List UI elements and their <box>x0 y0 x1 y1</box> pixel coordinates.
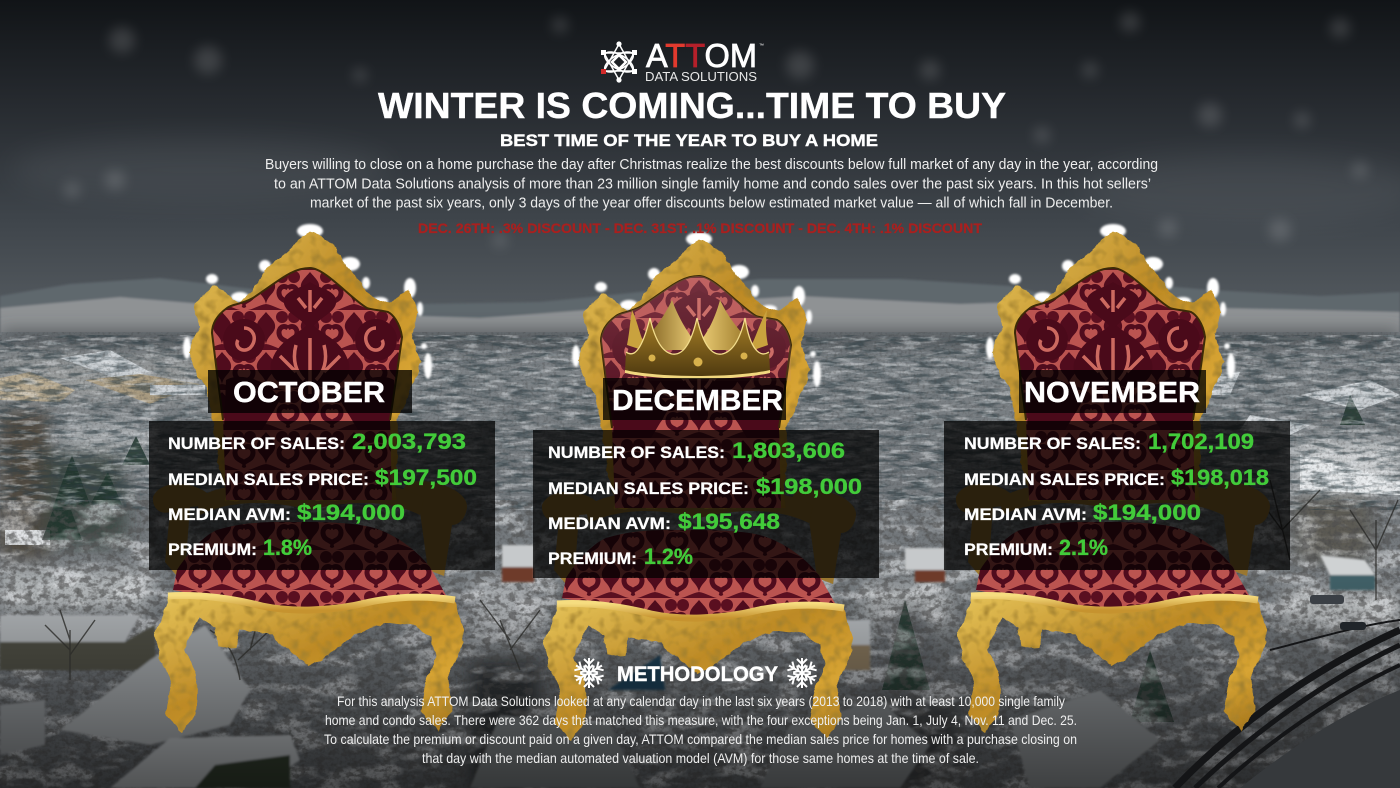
methodology heading with snowflake icons <box>574 658 817 688</box>
panel: December <box>533 378 879 578</box>
November data: $198,018 <box>1171 465 1269 490</box>
November data: MEDIAN AVM: <box>964 506 1087 524</box>
methodology text block <box>324 693 1077 766</box>
intro text block: Buyers willing to close on a home purchase the day after Christmas realize the best discounts below full market of any day in the year, according <box>265 157 1158 173</box>
October data: MEDIAN SALES PRICE: <box>168 471 369 489</box>
November data: $194,000 <box>1093 500 1201 525</box>
chair: October <box>153 224 467 731</box>
logo: ATTOM Data Solutions: DATA SOLUTIONS <box>645 69 757 84</box>
December heading: DECEMBER <box>612 385 783 417</box>
methodology text block: To calculate the premium or discount paid on a given day, ATTOM compared the median sales price for homes with a purchase closing on <box>324 731 1077 747</box>
October data: $197,500 <box>375 465 477 490</box>
logo: ATTOM Data Solutions: ™ <box>759 43 764 49</box>
December data: 1.2% <box>644 544 693 569</box>
intro text block: market of the past six years, only 3 days of the year offer discounts below estimated market value — all of which fall in December. <box>310 196 1113 212</box>
panel: November <box>944 370 1290 570</box>
title: WINTER IS COMING...TIME TO BUY <box>378 85 1006 126</box>
foreground houses <box>0 545 1375 788</box>
November data: MEDIAN SALES PRICE: <box>964 471 1165 489</box>
October data: MEDIAN AVM: <box>168 506 291 524</box>
November heading: NOVEMBER <box>1024 377 1200 409</box>
December data: MEDIAN AVM: <box>548 515 671 533</box>
methodology text block: home and condo sales. There were 362 days that matched this measure, with the four exceptions being Jan. 1, July 4, Nov. 11 and Dec. 25. <box>325 712 1077 728</box>
icon: snowflake left <box>574 658 604 688</box>
December data: $195,648 <box>678 509 780 534</box>
November data <box>944 421 1290 570</box>
December heading <box>603 378 786 420</box>
intro text block: to an ATTOM Data Solutions analysis of more than 23 million single family home and condo sales over the past six years. In this hot sellers’ <box>274 176 1151 192</box>
logo: ATTOM Data Solutions: ATTOM <box>646 37 757 74</box>
December data <box>533 430 879 578</box>
December data: NUMBER OF SALES: <box>548 444 725 462</box>
intro text block <box>265 157 1158 212</box>
October data: NUMBER OF SALES: <box>168 435 345 453</box>
November heading <box>1019 370 1206 413</box>
logo: ATTOM Data Solutions <box>601 37 764 84</box>
December data: $198,000 <box>756 474 862 499</box>
chair: December <box>542 232 856 739</box>
panel: October <box>149 370 495 570</box>
October data: 1.8% <box>263 535 312 560</box>
November data: PREMIUM: <box>964 541 1053 559</box>
icon: snowflake right <box>787 658 817 688</box>
December data: MEDIAN SALES PRICE: <box>548 480 749 498</box>
November data: NUMBER OF SALES: <box>964 435 1141 453</box>
methodology text block: that day with the median automated valuation model (AVM) for those same homes at the time of sale. <box>422 750 979 766</box>
icon: atom star <box>601 41 637 83</box>
subtitle: BEST TIME OF THE YEAR TO BUY A HOME <box>500 131 878 150</box>
October heading: OCTOBER <box>233 377 385 409</box>
discount dates callout: DEC. 26TH: .3% DISCOUNT - DEC. 31ST: .1% DISCOUNT - DEC. 4TH: .1% DISCOUNT <box>418 220 982 236</box>
October data: PREMIUM: <box>168 541 257 559</box>
November data: 2.1% <box>1059 535 1108 560</box>
chair: November <box>956 224 1270 731</box>
icon: gold crown on December chair <box>625 300 770 379</box>
low frequency scene masses <box>0 332 1400 788</box>
October data: 2,003,793 <box>352 429 466 454</box>
December data: 1,803,606 <box>732 438 845 463</box>
methodology text block: For this analysis ATTOM Data Solutions looked at any calendar day in the last six years (2013 to 2018) with at least 10,000 single family <box>337 693 1065 709</box>
October data: $194,000 <box>297 500 405 525</box>
December data: PREMIUM: <box>548 550 637 568</box>
methodology heading with snowflake icons: METHODOLOGY <box>617 663 778 686</box>
October heading <box>208 370 412 413</box>
October data <box>149 421 495 570</box>
November data: 1,702,109 <box>1148 429 1254 454</box>
